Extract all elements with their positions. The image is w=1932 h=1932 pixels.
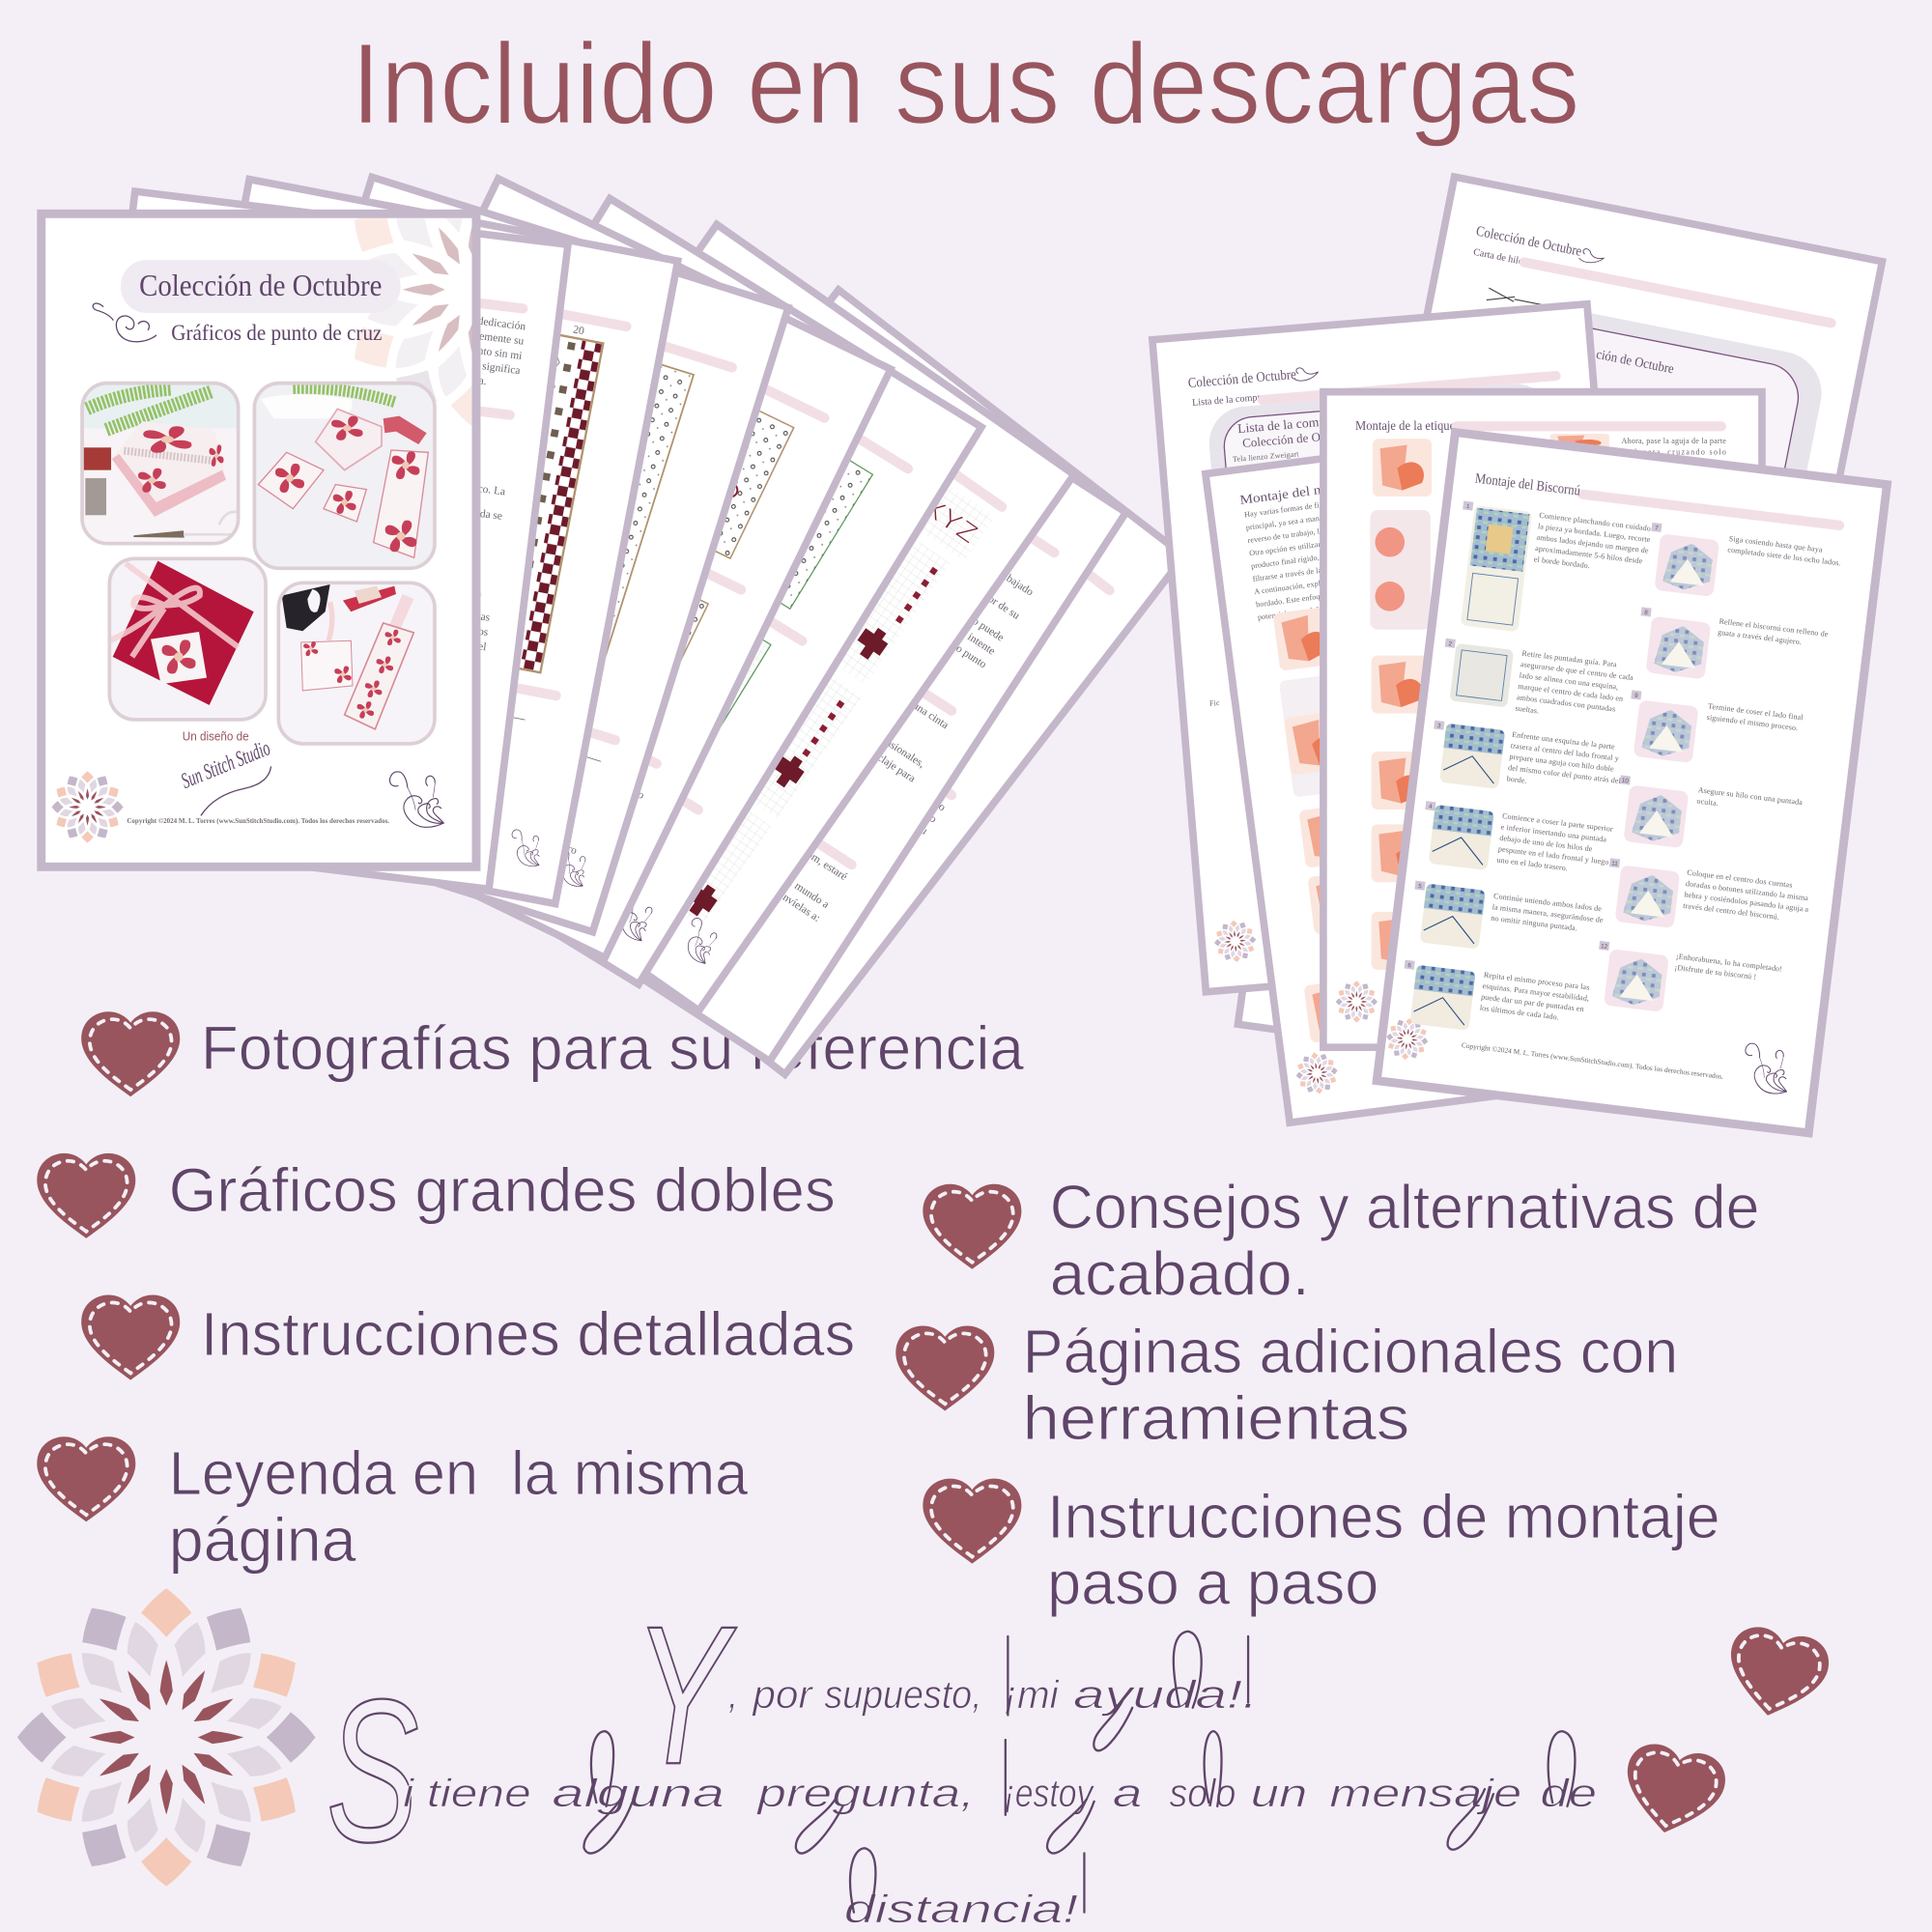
script line 2: mensaje bbox=[1329, 1771, 1521, 1815]
step text: ¡Disfrute de su biscornú ! bbox=[1674, 963, 1757, 981]
title: Incluido en sus descargas bbox=[352, 21, 1579, 149]
photo: pillow and bookmark with scissors bbox=[278, 582, 435, 744]
faded flower bbox=[354, 218, 471, 426]
footer copyright: Copyright ©2024 M. L. Torres (www.SunStitchStudio.com). Todos los derechos reservados. bbox=[1462, 1040, 1724, 1081]
script line 1 bbox=[634, 1584, 1258, 1805]
icon: heart bbox=[895, 1325, 994, 1410]
page: lista de la compra: Lista de la compra bbox=[1192, 392, 1265, 409]
page B with checker chart bbox=[127, 180, 678, 904]
page F with XYZ chart: UXYZ bbox=[899, 478, 983, 549]
text: consejos: acabado. bbox=[1050, 1239, 1310, 1309]
text: leyenda: página bbox=[169, 1505, 356, 1575]
icon: heart bbox=[1719, 1622, 1833, 1725]
step text bbox=[1479, 511, 1843, 1025]
photo border bbox=[254, 384, 435, 568]
step numbers: 9 bbox=[1634, 693, 1638, 699]
page A with text: del bbox=[472, 640, 487, 653]
page: montaje de la etiqueta: Montaje de la etiqueta bbox=[1355, 418, 1464, 434]
step text: no omitir ninguna puntada. bbox=[1491, 914, 1577, 932]
step text: debajo de uno de los hilos de bbox=[1499, 834, 1593, 853]
step text: Retire las puntadas guía. Para bbox=[1521, 649, 1618, 668]
page: montaje de la etiqueta bbox=[1323, 392, 1762, 1047]
page A with text: nú bbox=[466, 588, 480, 602]
photo border bbox=[82, 384, 239, 544]
step text: Asegure su hilo con una puntada bbox=[1697, 785, 1804, 807]
script line 1: , bbox=[728, 1672, 738, 1717]
step text: esquinas. Para mayor estabilidad, bbox=[1482, 981, 1590, 1003]
step text: trasera al centro del lado frontal y bbox=[1510, 741, 1619, 763]
script line 2: a bbox=[1113, 1771, 1142, 1815]
icon: heart bbox=[37, 1153, 135, 1238]
page G: el mundo a bbox=[783, 874, 831, 911]
cover title: Colección de Octubre bbox=[139, 269, 382, 302]
step text: e inferior insertando una puntada bbox=[1500, 822, 1607, 844]
step text: Comience a coser la parte superior bbox=[1502, 811, 1613, 834]
script line 1: Y bbox=[634, 1584, 737, 1805]
step text: siguiendo el mismo proceso. bbox=[1706, 713, 1799, 732]
page: montaje del marco: A continuación, explico bbox=[1254, 578, 1331, 596]
text: leyenda: Leyenda en la misma bbox=[169, 1438, 749, 1508]
step text: Comience planchando con cuidado bbox=[1539, 511, 1651, 533]
page A with text: blanco. La bbox=[458, 481, 506, 497]
step text: Coloque en el centro dos cuentas bbox=[1687, 868, 1793, 890]
text: montaje bbox=[1047, 1482, 1720, 1618]
step text: oculta. bbox=[1696, 797, 1719, 808]
page G: trabajado bbox=[994, 566, 1036, 599]
page: montaje del marco: principal, ya sea a mano o bbox=[1245, 513, 1330, 532]
step text: Termine de coser el lado final bbox=[1708, 701, 1804, 722]
text: páginas: Páginas adicionales con bbox=[1023, 1317, 1678, 1386]
page: carta de hilos: ción de Octubre bbox=[1595, 347, 1675, 377]
page: montaje del marco: filtrarse a través de la tela bbox=[1252, 564, 1336, 583]
page: montaje del biscornú bbox=[1377, 433, 1887, 1133]
step text: marque el centro de cada lado en bbox=[1518, 682, 1624, 703]
signature bbox=[178, 735, 273, 815]
page G: nclaje para bbox=[870, 749, 917, 784]
page: lista de la compra: Fic bbox=[1209, 698, 1220, 708]
page: carta de hilos bbox=[1327, 177, 1882, 903]
feature list: left column bbox=[37, 1011, 1024, 1575]
page B with checker chart: Muy Claro bbox=[412, 806, 463, 826]
page G: ro punto bbox=[951, 640, 988, 671]
cover title bbox=[121, 260, 401, 313]
script line 2: solo bbox=[1169, 1771, 1236, 1815]
step text: doradas o botones utilizando la misma bbox=[1686, 879, 1809, 902]
step text: puede dar un par de puntadas en bbox=[1481, 992, 1584, 1013]
photo border bbox=[109, 558, 266, 720]
page: montaje del marco: Otra opción es utilizar un bbox=[1249, 538, 1331, 557]
panel: right cluster of pages bbox=[1152, 177, 1887, 1133]
page: lista de la compra: Lista de la compra bbox=[1236, 413, 1336, 436]
icon: heart bbox=[81, 1295, 180, 1380]
step text: Repita el mismo proceso para las bbox=[1483, 971, 1590, 992]
step text: hebra y cosiéndolos pasando la aguja a bbox=[1684, 890, 1809, 914]
step numbers: 3 bbox=[1436, 723, 1441, 729]
step numbers: 1 bbox=[1465, 503, 1470, 510]
step text: lado se alinea con una esquina, bbox=[1519, 670, 1619, 692]
step text: Siga cosiendo hasta que haya bbox=[1728, 534, 1823, 554]
script line 2: i tiene bbox=[403, 1771, 531, 1815]
page D with symbol chart: ro bbox=[633, 787, 646, 802]
icon: heart bbox=[923, 1184, 1021, 1269]
page G: envíelas a: bbox=[777, 889, 822, 924]
step text: los últimos de cada lado. bbox=[1479, 1004, 1559, 1022]
page: montaje de la etiqueta: de lanera, cruzando solo bbox=[1622, 448, 1726, 457]
page: carta de hilos: Carta de hilos bbox=[1472, 247, 1528, 269]
page: lista de la compra bbox=[1152, 304, 1640, 992]
page: lista de la compra: Tela lienzo Zweigart bbox=[1233, 449, 1300, 464]
page G: o intente bbox=[958, 627, 997, 657]
step text: aproximadamente 5-6 hilos desde bbox=[1535, 544, 1643, 565]
script line 1: supuesto, bbox=[824, 1672, 982, 1717]
page G: una cinta bbox=[910, 699, 951, 731]
step text: sueltas. bbox=[1515, 704, 1540, 716]
feature list: right column bbox=[895, 1173, 1759, 1618]
text: instrucciones: Instrucciones detalladas bbox=[201, 1299, 855, 1369]
script line 2 bbox=[327, 1658, 1597, 1885]
cover flower bbox=[52, 771, 124, 842]
text: consejos: Consejos y alternativas de bbox=[1050, 1173, 1759, 1242]
step text: uno en el lado trasero. bbox=[1496, 856, 1569, 872]
step text: completado siete de los ocho lados. bbox=[1727, 545, 1841, 568]
step text: guata a través del agujero. bbox=[1718, 628, 1803, 646]
script closing message bbox=[327, 1584, 1597, 1931]
script line 1: ayuda!. bbox=[1073, 1672, 1258, 1717]
text: consejos bbox=[1050, 1173, 1759, 1309]
page F with XYZ chart bbox=[342, 224, 1074, 1010]
script line 1: por bbox=[751, 1672, 813, 1717]
step text: Enfrente una esquina de la parte bbox=[1512, 730, 1616, 752]
page E with green chart bbox=[267, 199, 981, 984]
text: páginas bbox=[1023, 1317, 1678, 1453]
thumbnails: etiqueta bbox=[1370, 434, 1609, 970]
page H: bajo bbox=[925, 793, 948, 813]
page A with text bbox=[56, 191, 568, 889]
text: montaje: Instrucciones de montaje bbox=[1047, 1482, 1720, 1551]
icon: heart bbox=[923, 1479, 1021, 1564]
fan of chart pages bbox=[56, 177, 1184, 1074]
page G: o puede bbox=[970, 615, 1006, 644]
script line 2: un bbox=[1251, 1771, 1307, 1815]
step numbers: 2 bbox=[1448, 640, 1453, 648]
signature: Sun Stitch Studio bbox=[178, 735, 273, 793]
page G: or de su bbox=[985, 593, 1022, 622]
page A with text: tos bbox=[474, 625, 489, 639]
step text: el borde bordado. bbox=[1533, 554, 1590, 570]
icon: heart bbox=[1616, 1739, 1730, 1843]
photographs bbox=[82, 384, 435, 744]
step text: del mismo color del punto atrás del bbox=[1508, 763, 1622, 785]
script line 2: pregunta, bbox=[755, 1771, 975, 1815]
step text: borde. bbox=[1506, 774, 1527, 785]
panel: cover page bbox=[37, 209, 481, 871]
cover sheet bbox=[42, 213, 476, 867]
photo: red box with pillow bbox=[109, 558, 266, 720]
script line 1: ¡mi bbox=[1005, 1672, 1060, 1717]
page A with text: nda se bbox=[473, 507, 503, 523]
page: lista de la compra: Colección de Octu bbox=[1242, 429, 1337, 450]
page: lista de la compra: Colección de Octubre bbox=[1187, 367, 1296, 391]
page: montaje del marco: Hay varias formas de finalizar bbox=[1244, 497, 1342, 519]
page A with text: ada. bbox=[468, 374, 488, 387]
step text: pespunte en el lado frontal y luego bbox=[1497, 844, 1609, 867]
step numbers: 5 bbox=[1418, 883, 1423, 890]
page: montaje del marco: potencialmente dañino bbox=[1257, 604, 1330, 622]
page: montaje del marco: producto final rígido, lo bbox=[1250, 552, 1328, 571]
page: montaje del marco: reverso de tu trabajo, lo cual bbox=[1247, 525, 1340, 545]
step numbers: 10 bbox=[1621, 778, 1630, 784]
page H: mo bbox=[921, 808, 939, 826]
step numbers: 8 bbox=[1644, 610, 1649, 616]
decorative flower bbox=[17, 1588, 316, 1887]
icon: heart bbox=[81, 1011, 180, 1096]
icon: heart bbox=[37, 1436, 135, 1521]
page: carta de hilos: Colección de Octubre bbox=[1475, 224, 1583, 260]
hidden page sliver bbox=[1237, 377, 1761, 1085]
page A with text: ción significa bbox=[460, 358, 521, 377]
page: montaje del marco: bordado. Este enfoque bbox=[1256, 591, 1328, 609]
photo: biscornu with fern bbox=[82, 384, 239, 544]
page H: su bbox=[915, 822, 929, 838]
page B with checker chart: 20 bbox=[572, 324, 585, 337]
step text: asegurarse de que el centro de cada bbox=[1520, 660, 1634, 682]
step text: ambos lados dejando un margen de bbox=[1536, 533, 1649, 555]
text: páginas: herramientas bbox=[1023, 1383, 1409, 1453]
script line 2: de bbox=[1540, 1771, 1597, 1815]
page G bbox=[404, 275, 1126, 1062]
step text: través del centro del biscornú. bbox=[1683, 901, 1779, 922]
script line 3: distancia! bbox=[844, 1887, 1078, 1931]
step numbers: 11 bbox=[1611, 861, 1619, 867]
step numbers: 4 bbox=[1429, 804, 1433, 810]
page: montaje del marco bbox=[1206, 417, 1722, 1122]
step text: la misma manera, asegurándose de bbox=[1492, 902, 1604, 924]
copyright: Copyright ©2024 M. L. Torres (www.SunStitchStudio.com). Todos los derechos reservados. bbox=[127, 816, 389, 825]
script line 2: alguna bbox=[552, 1771, 724, 1815]
script line 2: S bbox=[327, 1658, 418, 1885]
step text: ¡Enhorabuena, lo ha completado! bbox=[1675, 952, 1783, 974]
step text: ambos cuadrados con puntadas bbox=[1516, 693, 1616, 714]
page A with text: mento sin mi bbox=[464, 344, 523, 362]
text: leyenda bbox=[169, 1438, 749, 1575]
icon: swirl bbox=[93, 303, 156, 342]
step text: Rellene el biscornú con relleno de bbox=[1719, 616, 1829, 639]
step numbers: 6 bbox=[1407, 962, 1412, 970]
step numbers: 7 bbox=[1655, 525, 1659, 532]
page C with symbol chart: Claro bbox=[552, 838, 579, 857]
thumbnails: marco bbox=[1273, 606, 1374, 1043]
cover subtitle: Gráficos de punto de cruz bbox=[171, 321, 382, 345]
script line 2: ¡estoy bbox=[1005, 1771, 1095, 1815]
page A with text: y dedicación bbox=[469, 315, 526, 333]
page G: nsionales, bbox=[883, 737, 926, 770]
photo: set of biscornu and bookmark bbox=[254, 384, 435, 568]
page C with symbol chart bbox=[177, 177, 788, 932]
page C with symbol chart: dio bbox=[556, 754, 574, 770]
page B with checker chart: Oscuro bbox=[437, 745, 470, 762]
page D with symbol chart bbox=[213, 179, 891, 957]
page: montaje de la etiqueta: Ahora, pase la aguja de la parte bbox=[1622, 437, 1726, 445]
script flourishes bbox=[583, 1632, 1575, 1918]
text: gráficos: Gráficos grandes dobles bbox=[169, 1155, 836, 1225]
page G: om, estaré bbox=[805, 848, 849, 883]
text: fotografías: Fotografías para su referencia bbox=[201, 1013, 1024, 1083]
page: montaje del marco: Montaje del marco bbox=[1239, 478, 1351, 507]
icon: swirl bbox=[390, 772, 443, 827]
page A with text: ablemente su bbox=[466, 328, 525, 348]
step numbers: 12 bbox=[1601, 943, 1608, 951]
step text: Continúe uniendo ambos lados de bbox=[1493, 892, 1603, 913]
photo border bbox=[278, 582, 435, 744]
page C with symbol chart: ro bbox=[554, 778, 567, 791]
text: montaje: paso a paso bbox=[1047, 1548, 1378, 1618]
step numbers bbox=[1405, 501, 1662, 970]
step text: prepare una aguja con hilo doble bbox=[1509, 753, 1615, 774]
page B with checker chart: Medio bbox=[441, 718, 472, 735]
step text: la pieza ya bordada. Luego, recorte bbox=[1537, 522, 1651, 544]
page H bbox=[440, 290, 1184, 1074]
page A with text: las bbox=[477, 611, 491, 624]
step thumbnails bbox=[1409, 505, 1719, 1031]
designer credit: Un diseño de bbox=[183, 729, 249, 744]
page: montaje del biscornú: Montaje del Biscornú bbox=[1474, 471, 1581, 499]
